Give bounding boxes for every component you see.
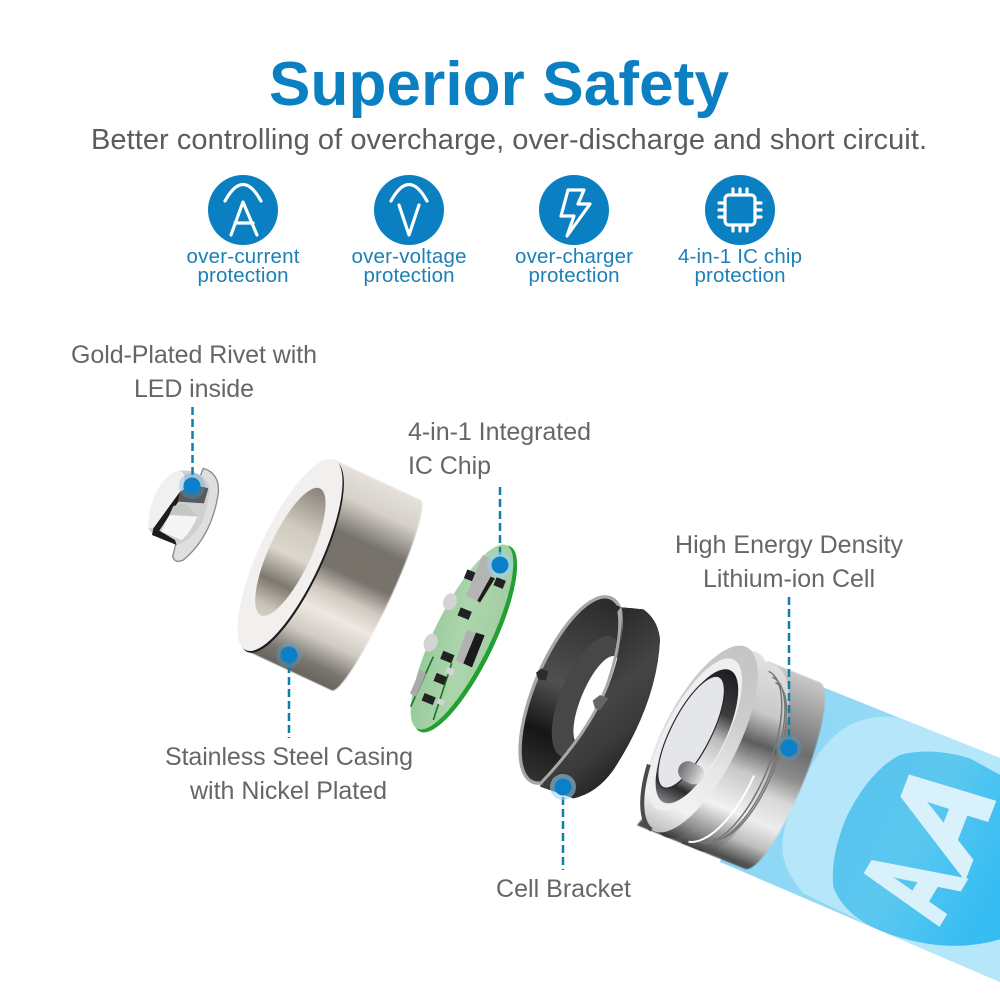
icon: ampere: [208, 175, 278, 245]
icon: lightning bolt: [539, 175, 609, 245]
casing shadow edge: [219, 448, 364, 665]
battery cap: [619, 630, 793, 854]
cap ring shadow: [623, 765, 677, 830]
label: over-current: over-current: [186, 245, 300, 268]
marker dot: [276, 642, 302, 668]
board edge: [394, 534, 536, 744]
circuit board chip: [392, 533, 536, 744]
casing body: [246, 460, 433, 696]
feature: over-voltage protection: [352, 175, 466, 287]
rivet window: [161, 515, 197, 540]
contact face: [645, 668, 737, 797]
stainless steel casing: [217, 447, 433, 697]
callout: casing: [165, 642, 413, 805]
label text: IC Chip: [408, 452, 491, 480]
bracket rim front: [540, 608, 620, 784]
leader: [562, 797, 564, 870]
callout: cell: [675, 531, 904, 761]
cap well: [639, 658, 755, 814]
marker dot: [776, 735, 802, 761]
board components: [410, 555, 506, 720]
cell bracket: [499, 584, 660, 798]
label text: Lithium-ion Cell: [703, 565, 875, 593]
cap inner rim: [631, 646, 760, 823]
label text: Gold-Plated Rivet with: [71, 341, 317, 369]
label: 4-in-1 IC chip: 4-in-1 IC chip: [678, 245, 802, 268]
callout: IC chip: [408, 418, 591, 578]
rivet recess shadow: [152, 492, 180, 545]
bracket inner wall: [499, 584, 644, 796]
battery label: [720, 687, 1000, 982]
feature: over-current protection: [186, 175, 300, 287]
bracket opening: [564, 650, 629, 750]
AA letter 1: A: [832, 834, 991, 936]
casing hole: [242, 480, 339, 624]
label: over-charger: over-charger: [515, 245, 633, 268]
rivet upper shade: [178, 486, 208, 503]
bracket rim: [499, 584, 644, 796]
marker dot: [179, 473, 205, 499]
label: protection: protection: [694, 264, 786, 287]
rivet flange: [173, 468, 218, 561]
label text: [675, 531, 904, 593]
shroud: [637, 639, 840, 877]
feature: IC chip protection: [678, 175, 802, 287]
cap side: [628, 635, 793, 854]
ribs: [682, 658, 810, 865]
label text: Cell Bracket: [496, 875, 631, 903]
bracket outer band: [540, 598, 660, 798]
callout: bracket: [496, 774, 631, 903]
label: over-voltage: over-voltage: [352, 245, 466, 268]
label: protection: protection: [364, 264, 454, 287]
label text: 4-in-1 Integrated: [408, 418, 591, 446]
callout: rivet: [71, 341, 317, 499]
leader: [788, 597, 790, 745]
label text: LED inside: [134, 375, 254, 403]
label text: Stainless Steel Casing: [165, 743, 413, 771]
bracket band over opening: [542, 607, 660, 798]
leader: [191, 407, 194, 480]
board face: [392, 533, 532, 741]
title: Superior Safety: [269, 50, 730, 119]
feature: over-charger protection: [515, 175, 633, 287]
label: protection: protection: [198, 264, 288, 287]
AA battery: [636, 646, 1000, 982]
label text: [165, 743, 413, 805]
bracket inner step: [537, 627, 636, 767]
label: protection: protection: [528, 264, 620, 287]
label text: with Nickel Plated: [189, 777, 387, 805]
label blue panel: [833, 752, 1000, 946]
icon: chip: [705, 175, 775, 245]
leader: [499, 487, 501, 560]
marker dot: [487, 552, 513, 578]
marker dot: [550, 774, 576, 800]
label text: [71, 341, 317, 403]
rivet body: [148, 470, 209, 545]
gold-plated rivet: [148, 468, 218, 561]
casing front face: [218, 447, 362, 663]
battery shroud and ribs: [637, 639, 840, 877]
label text: [408, 418, 591, 480]
label light panel: [782, 717, 1000, 990]
cap front ring: [619, 630, 781, 848]
contact pin: [675, 758, 708, 788]
rivet LED: [169, 503, 197, 516]
subtitle: Better controlling of overcharge, over-discharge and short circuit.: [91, 124, 927, 156]
leader: [288, 665, 290, 738]
rivet front face: [148, 471, 184, 528]
icon: volt: [374, 175, 444, 245]
label text: High Energy Density: [675, 531, 904, 559]
bracket tabs: [536, 598, 621, 710]
